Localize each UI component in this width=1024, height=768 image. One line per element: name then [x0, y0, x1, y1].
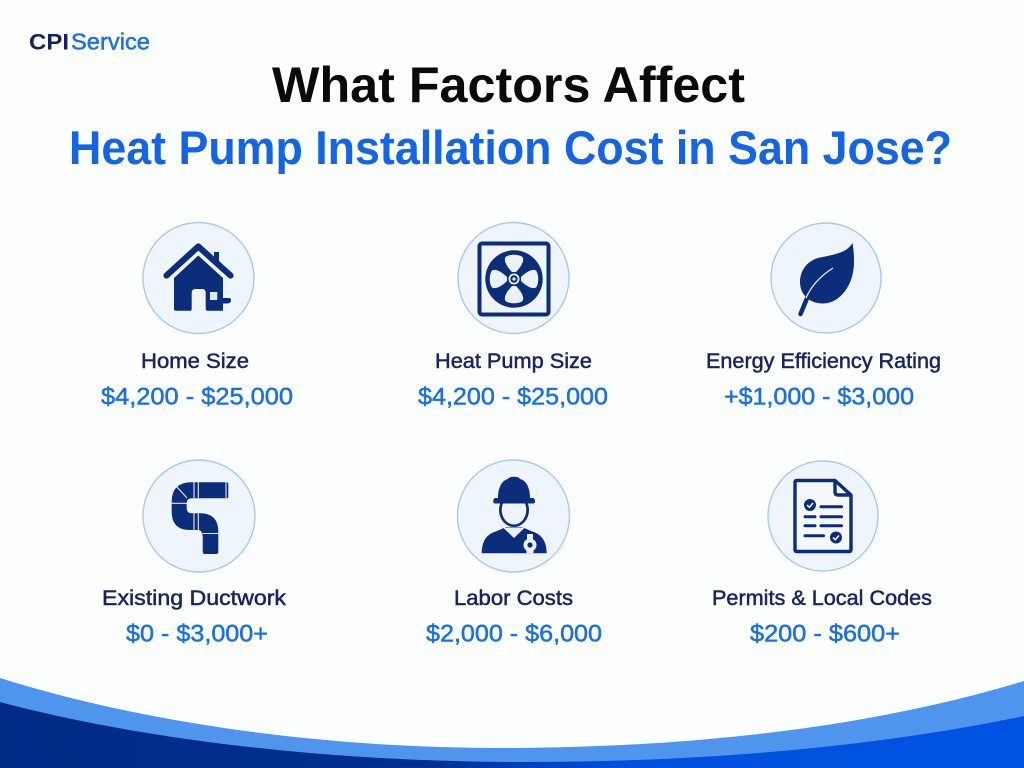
icon: document: [768, 461, 878, 571]
logo: CPI Service: [29, 28, 150, 54]
price: existing ductwork: $0 - $3,000+: [126, 620, 268, 648]
icon: house: [143, 222, 254, 334]
label: permits and local codes: Permits & Local Codes: [712, 586, 932, 610]
label: heat pump size: Heat Pump Size: [435, 349, 592, 373]
panel: home size: [101, 222, 293, 410]
icon: duct: [143, 460, 255, 572]
panel: labor costs: [426, 460, 602, 648]
label: energy efficiency rating: Energy Efficiency Rating: [706, 349, 941, 373]
panel: existing ductwork: [102, 460, 286, 648]
title: [69, 57, 952, 175]
icon: worker: [458, 460, 570, 572]
price: home size: $4,200 - $25,000: [101, 384, 293, 410]
panel: heat pump size: [418, 222, 608, 410]
label: labor costs: Labor Costs: [454, 586, 573, 610]
price: labor costs: $2,000 - $6,000: [426, 620, 602, 648]
label: existing ductwork: Existing Ductwork: [102, 586, 286, 610]
icon: leaf: [771, 223, 881, 333]
price: energy efficiency rating: +$1,000 - $3,000: [724, 384, 914, 410]
icon: fan unit: [458, 222, 569, 334]
logo: CPI Service: CPI: [29, 30, 69, 54]
logo: CPI Service: Service: [71, 28, 150, 54]
title: What Factors Affect: [272, 57, 745, 113]
title: Heat Pump Installation Cost in San Jose?: [69, 122, 952, 175]
price: permits and local codes: $200 - $600+: [750, 620, 900, 648]
label: home size: Home Size: [141, 349, 249, 373]
price: heat pump size: $4,200 - $25,000: [418, 384, 608, 410]
panel: energy efficiency rating: [706, 223, 941, 410]
panel: permits and local codes: [712, 461, 932, 648]
footer wave: [0, 678, 1024, 768]
